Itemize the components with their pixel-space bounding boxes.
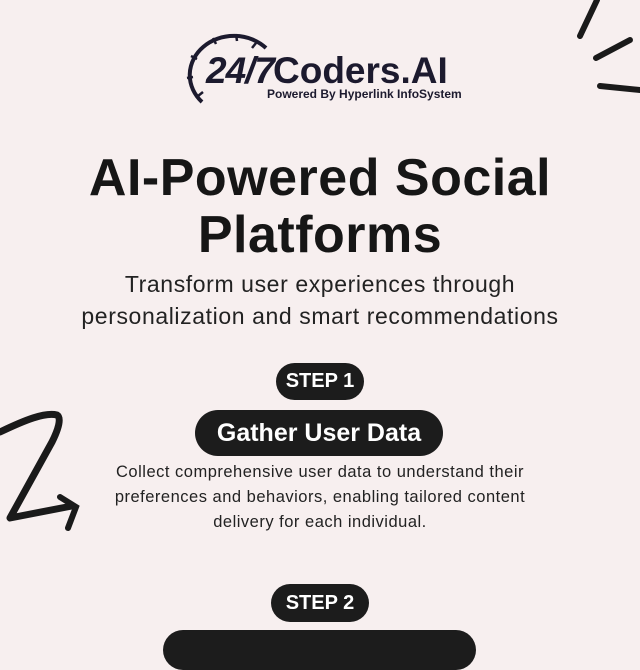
step 1 heading [195,410,443,456]
logo: Coders.AI [273,50,448,91]
step 1 badge: STEP 1 [286,370,354,392]
title [89,149,551,264]
step 1 description: Collect comprehensive user data to understand their [116,463,524,481]
title: AI-Powered Social [89,149,551,207]
arrow [0,410,80,531]
step 2 badge: STEP 2 [286,592,354,614]
title: Platforms [198,206,442,264]
decorative strokes top right [577,0,640,93]
step 1 description [115,463,525,531]
step 1 badge [276,363,364,400]
step 1 heading: Gather User Data [217,418,421,446]
subtitle: personalization and smart recommendations [81,303,559,329]
step 2 badge [271,584,369,622]
logo: Powered By Hyperlink InfoSystem [267,87,462,101]
logo [186,34,462,104]
step 2 heading [163,630,476,670]
subtitle: Transform user experiences through [125,271,515,297]
step 1 description: preferences and behaviors, enabling tailored content [115,488,525,506]
logo: 24/7 [206,50,274,91]
step 1 description: delivery for each individual. [213,513,427,531]
subtitle [81,271,559,329]
